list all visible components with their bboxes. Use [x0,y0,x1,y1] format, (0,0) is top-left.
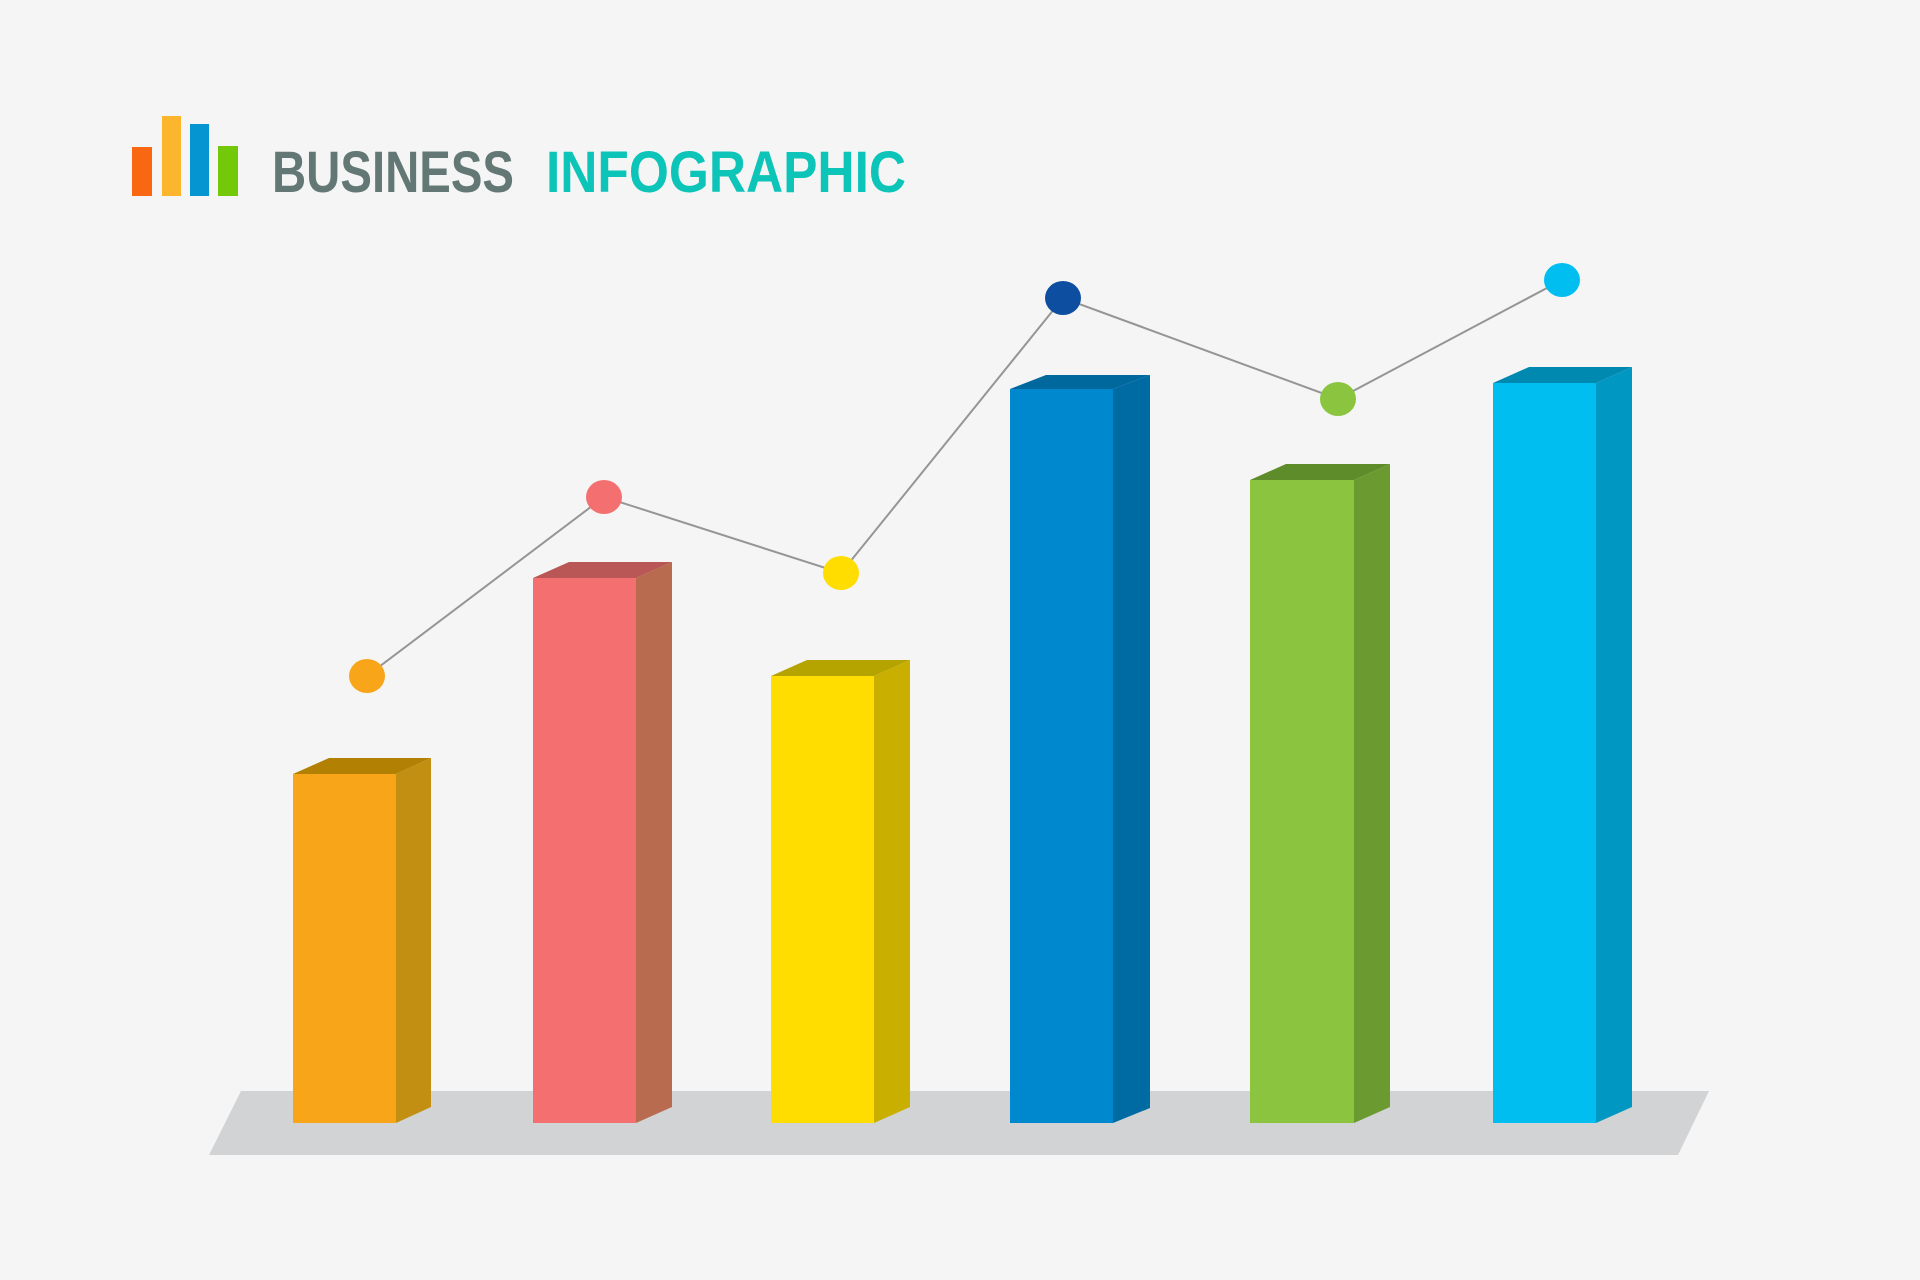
bar 4 [1010,375,1150,1123]
bar 3 [771,660,910,1123]
bar 6 [1493,367,1632,1123]
icon: logo bars [132,116,238,196]
bar chart [293,367,1632,1123]
floor [209,1091,1709,1155]
bar 1 [293,758,431,1123]
title: BUSINESS [272,140,514,205]
title: INFOGRAPHIC [546,140,906,205]
bar 5 [1250,464,1390,1123]
title [272,140,906,205]
line chart [349,263,1580,693]
logo [132,116,906,205]
dots [349,263,1580,693]
bar 2 [533,562,672,1123]
